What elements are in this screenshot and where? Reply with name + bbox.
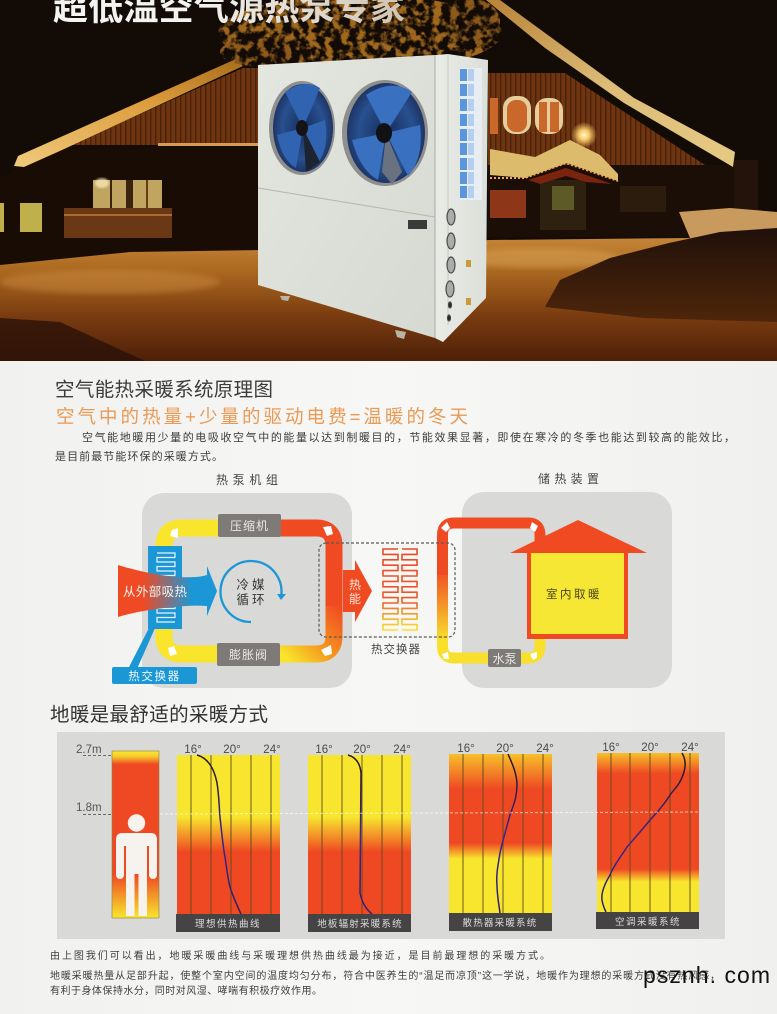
person icon bbox=[116, 814, 157, 916]
intro paragraph bbox=[55, 430, 735, 463]
left windows bbox=[0, 178, 172, 238]
flow arrows bbox=[168, 526, 333, 656]
coil grille bbox=[460, 68, 482, 200]
floor heating heading: 地暖是最舒适的采暖方式 bbox=[50, 704, 268, 726]
heat energy arrow bbox=[343, 560, 372, 622]
panel: temperature comparison charts bbox=[57, 732, 725, 939]
right lower storey bbox=[488, 165, 738, 237]
foliage above the unit bbox=[218, 0, 502, 71]
unit front face bbox=[258, 55, 435, 338]
heat energy arrow: 能 bbox=[349, 592, 361, 606]
chart: floor radiant: 20° bbox=[353, 744, 371, 756]
blue callout bbox=[112, 628, 197, 684]
left snow roof bbox=[14, 59, 243, 167]
water pump label: 水泵 bbox=[492, 652, 517, 666]
height markers bbox=[76, 744, 112, 814]
heat energy arrow: 热 bbox=[349, 578, 361, 592]
chart: air conditioning: 20° bbox=[641, 742, 659, 754]
compressor label bbox=[218, 514, 281, 537]
chart: radiator: 16° bbox=[457, 743, 475, 755]
panel: heat pump unit bbox=[112, 473, 372, 688]
yard snow bbox=[0, 232, 777, 361]
feet bbox=[280, 296, 290, 301]
chart: radiator: 20° bbox=[496, 743, 514, 755]
intake label: 从外部吸热 bbox=[123, 584, 187, 599]
nameplate bbox=[408, 220, 427, 229]
snow mound right bbox=[545, 228, 777, 322]
outdoor heat exchanger bbox=[148, 546, 182, 629]
unit side face bbox=[435, 54, 488, 342]
snow mound lower left bbox=[0, 318, 145, 361]
blue callout: 热交换器 bbox=[128, 669, 181, 683]
left gable wall bbox=[60, 68, 262, 150]
chart: floor radiant: 16° bbox=[315, 744, 333, 756]
cycle label: 循环 bbox=[236, 593, 268, 607]
closing paragraphs bbox=[50, 949, 720, 997]
panel: heat storage bbox=[441, 471, 672, 688]
chart: radiator: 散热器采暖系统 bbox=[463, 917, 537, 929]
closing paragraphs: 由上图我们可以看出，地暖采暖曲线与采暖理想供热曲线最为接近，是目前最理想的采暖方式。 bbox=[50, 949, 550, 962]
cycle label: 冷媒 bbox=[236, 578, 268, 592]
serpentine heat exchanger bbox=[383, 549, 417, 630]
chart: floor radiant bbox=[308, 744, 411, 932]
house: 室内取暖 bbox=[546, 587, 602, 601]
panel title: 储热装置 bbox=[538, 471, 599, 486]
expansion valve label bbox=[217, 643, 280, 666]
chart: ideal curve bbox=[176, 744, 281, 932]
panel title: 热泵机组 bbox=[216, 473, 278, 487]
chart: ideal curve: 理想供热曲线 bbox=[195, 918, 261, 930]
compressor label: 压缩机 bbox=[230, 518, 269, 533]
refrigerant cycle arrow bbox=[220, 561, 286, 622]
intro paragraph: 是目前最节能环保的采暖方式。 bbox=[55, 449, 223, 463]
orange slogan: 空气中的热量+少量的驱动电费=温暖的冬天 bbox=[56, 406, 468, 427]
hero photo: snowy lodge at night bbox=[0, 0, 777, 361]
chart: air conditioning: 空调采暖系统 bbox=[615, 916, 681, 928]
expansion valve label: 膨胀阀 bbox=[229, 648, 268, 662]
water loop pipes bbox=[442, 523, 540, 658]
water pump label bbox=[488, 649, 521, 667]
right bank of snow bbox=[679, 208, 777, 240]
chart: ideal curve: 16° bbox=[184, 744, 202, 756]
right gable wall bbox=[488, 73, 705, 168]
right snow roof bbox=[486, 0, 735, 167]
panel background bbox=[462, 492, 672, 688]
chart: ideal curve: 20° bbox=[223, 744, 241, 756]
refrigerant loop pipes bbox=[164, 528, 334, 654]
intro paragraph: 空气能地暖用少量的电吸收空气中的能量以达到制暖目的，节能效果显著，即使在寒冷的冬季也能达到较高的能效比， bbox=[82, 430, 735, 444]
chart: floor radiant: 地板辐射采暖系统 bbox=[317, 918, 403, 930]
lamp glow bbox=[571, 122, 597, 148]
brass fittings bbox=[466, 260, 471, 305]
chart: radiator: 24° bbox=[536, 743, 554, 755]
height markers: 1.8m bbox=[76, 802, 102, 814]
heat exchanger label: 热交换器 bbox=[371, 642, 420, 656]
flow arrows bbox=[441, 522, 538, 660]
cycle label bbox=[236, 578, 268, 607]
watermark: psznh. com bbox=[643, 962, 770, 988]
chart: radiator bbox=[449, 743, 554, 931]
fan left bbox=[269, 81, 335, 175]
panel background bbox=[142, 493, 352, 688]
chart: air conditioning: 24° bbox=[681, 742, 699, 754]
upper windows bbox=[490, 96, 563, 134]
chart: air conditioning: 16° bbox=[602, 742, 620, 754]
height markers: 2.7m bbox=[76, 744, 102, 756]
chart: ideal curve: 24° bbox=[263, 744, 281, 756]
dashed heat exchanger boundary bbox=[319, 543, 455, 637]
human height reference bbox=[76, 744, 159, 918]
fan right bbox=[342, 80, 428, 186]
chart panel background bbox=[57, 732, 725, 939]
gauges bbox=[446, 209, 455, 321]
house bbox=[510, 520, 647, 639]
system principle heading: 空气能热采暖系统原理图 bbox=[55, 379, 273, 401]
closing paragraphs: 有利于身体保持水分，同时对风湿、哮喘有积极疗效作用。 bbox=[50, 984, 322, 997]
intake arrow bbox=[118, 565, 217, 617]
left lower storey bbox=[0, 147, 262, 265]
closing paragraphs: 地暖采暖热量从足部升起，使整个室内空间的温度均匀分布，符合中医养生的“温足而凉顶”这一学说，地暖作为理想的采暖方式没有热风感， bbox=[50, 969, 720, 982]
right tree trunk bbox=[734, 160, 758, 228]
chart: floor radiant: 24° bbox=[393, 744, 411, 756]
chart: air conditioning bbox=[596, 742, 699, 929]
porch and door bbox=[490, 140, 666, 230]
heat pump unit bbox=[258, 54, 488, 342]
